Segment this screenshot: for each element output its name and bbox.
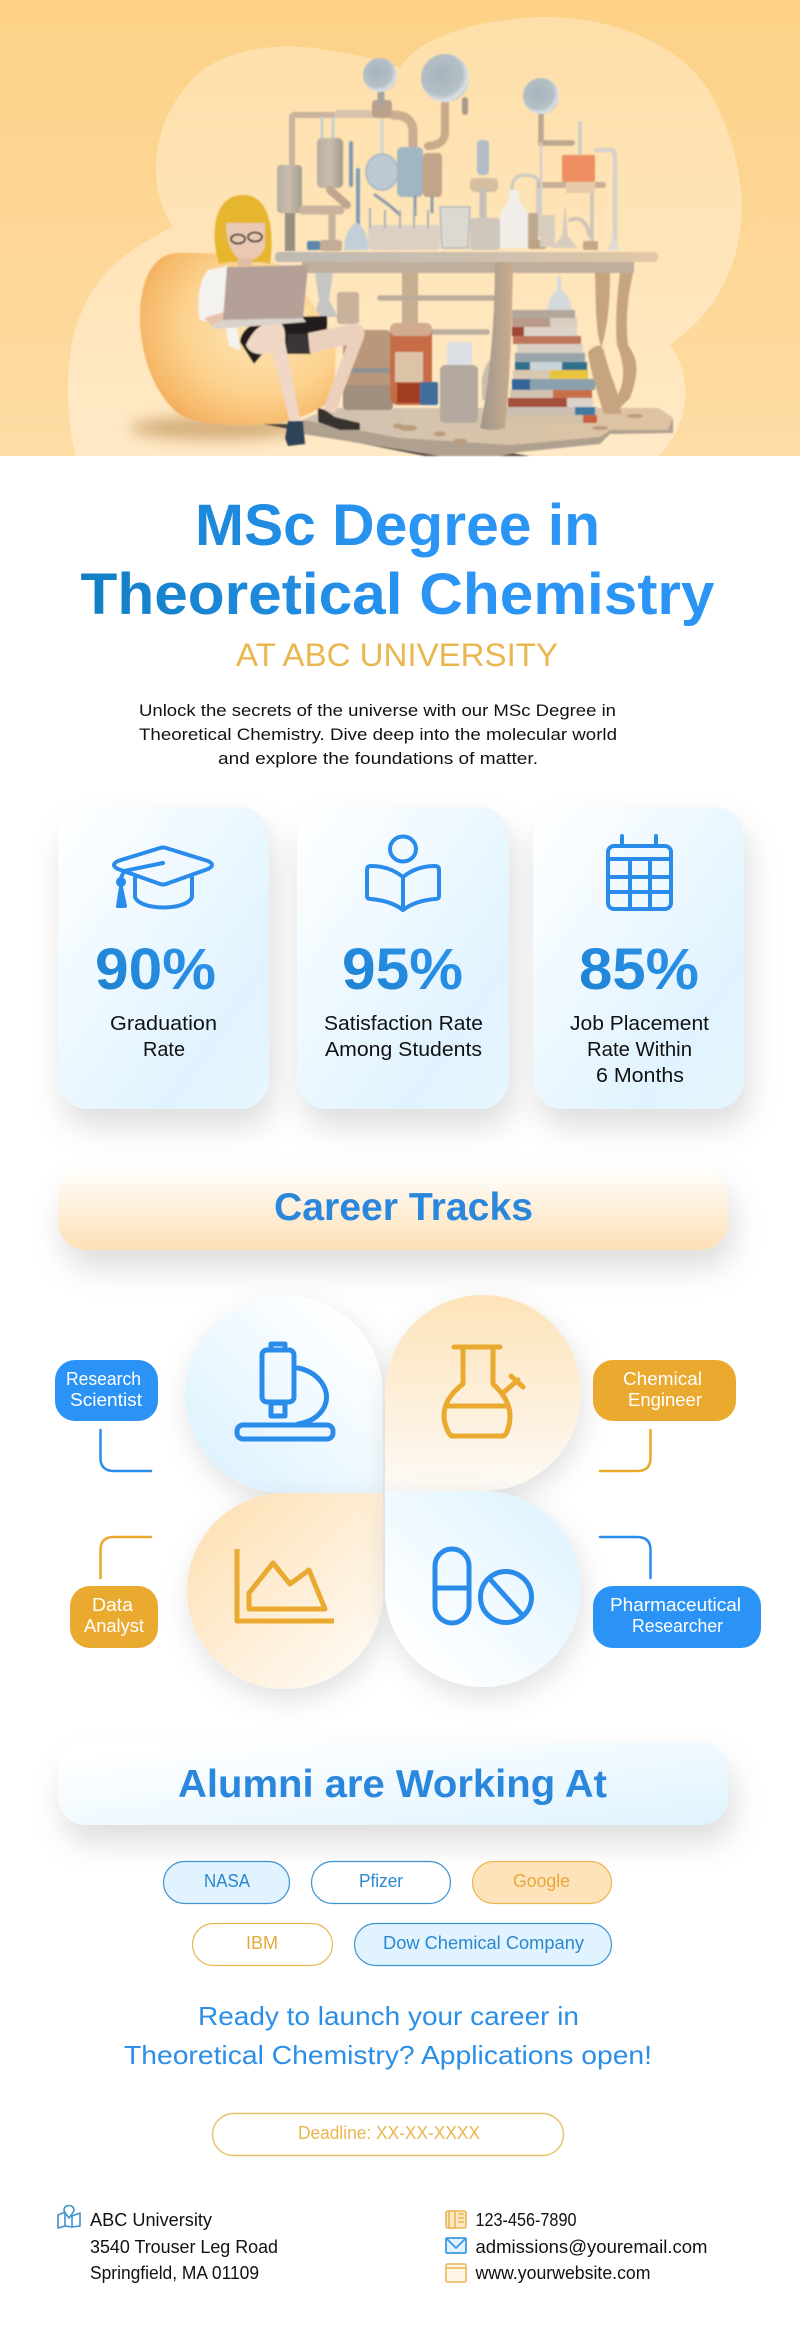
- stat label: Satisfaction Rate: [324, 1013, 483, 1035]
- under-table vessels: [314, 273, 572, 423]
- connector: chemical engineer: [600, 1430, 650, 1471]
- laptop: [223, 265, 308, 320]
- label: data analyst: [70, 1586, 158, 1648]
- upper pipework: [277, 92, 615, 251]
- icon: flask: [444, 1347, 523, 1436]
- bench base: [303, 408, 673, 456]
- pill: NASA: [164, 1862, 290, 1904]
- pill: Pfizer: Pfizer: [359, 1871, 403, 1891]
- stack of books: [507, 310, 597, 423]
- skirt: [240, 316, 327, 364]
- stat label: Rate Within: [587, 1039, 692, 1061]
- employer pills: [164, 1862, 612, 1966]
- shirt: [198, 266, 240, 350]
- subtitle: AT ABC UNIVERSITY: [236, 637, 558, 673]
- hair: [215, 195, 272, 264]
- pill: IBM: [192, 1924, 332, 1966]
- orange beaker: [562, 155, 595, 193]
- stat: 85%: 85%: [579, 937, 699, 1002]
- icon: mail: [446, 2238, 466, 2253]
- petal: research scientist: [185, 1295, 383, 1493]
- petal: data analyst: [187, 1493, 383, 1689]
- student: [198, 195, 365, 446]
- contact text: admissions@youremail.com: [476, 2237, 708, 2257]
- petal: pharmaceutical researcher: [385, 1491, 581, 1687]
- stat label: Job Placement: [570, 1013, 709, 1035]
- title: MSc Degree in: [195, 493, 600, 558]
- icon: browser window: [446, 2264, 466, 2282]
- connector: pharmaceutical researcher: [600, 1537, 650, 1578]
- forearm: [204, 312, 226, 326]
- 3D lab scene with student: [130, 54, 673, 456]
- intro paragraph: and explore the foundations of matter.: [218, 749, 538, 768]
- stat label: [570, 1013, 709, 1087]
- heading: alumni: [58, 1742, 728, 1825]
- face: [226, 223, 265, 261]
- pill: Google: [472, 1862, 612, 1904]
- call to action: [124, 2001, 652, 2070]
- glassware row: [307, 190, 620, 251]
- stat card: satisfaction rate: [297, 807, 509, 1109]
- label: data analyst: Data: [92, 1595, 134, 1615]
- floor shadows: [130, 416, 530, 456]
- petal: chemical engineer: [385, 1295, 581, 1491]
- pill: Dow Chemical Company: [354, 1924, 612, 1966]
- glass globes: [363, 54, 559, 114]
- contact text: [475, 2210, 708, 2283]
- footer contacts: [446, 2210, 708, 2283]
- address text: ABC University: [90, 2210, 212, 2230]
- icon: reader with book: [367, 836, 439, 910]
- label: chemical engineer: Engineer: [628, 1390, 702, 1410]
- stat label: Among Students: [325, 1039, 482, 1061]
- pill: Google: Google: [513, 1871, 570, 1891]
- label: research scientist: Scientist: [70, 1390, 142, 1410]
- label: pharmaceutical researcher: Pharmaceutical: [610, 1595, 741, 1615]
- heading: alumni: Alumni are Working At: [178, 1763, 607, 1806]
- stat card: graduation rate: [58, 807, 269, 1109]
- icon: graduation cap: [114, 848, 212, 908]
- heading: career tracks: [58, 1166, 728, 1250]
- connector: data analyst: [100, 1537, 151, 1578]
- address text: Springfield, MA 01109: [90, 2263, 259, 2283]
- hero illustration panel: [0, 0, 800, 456]
- table legs: [480, 262, 636, 430]
- icon: capsule and tablet: [435, 1549, 532, 1623]
- title: Theoretical Chemistry: [80, 562, 714, 627]
- pill: NASA: NASA: [204, 1871, 250, 1891]
- icon: calendar: [608, 836, 671, 909]
- title: [80, 493, 714, 627]
- deadline pill: [212, 2114, 564, 2156]
- stat label: 6 Months: [596, 1065, 684, 1087]
- label: research scientist: Research: [66, 1369, 141, 1389]
- contact text: www.yourwebsite.com: [475, 2263, 650, 2283]
- stat label: Graduation: [110, 1013, 217, 1035]
- label: chemical engineer: Chemical: [623, 1369, 702, 1389]
- icon: phone: [446, 2211, 466, 2228]
- label: pharmaceutical researcher: [593, 1586, 761, 1648]
- heading: career tracks: Career Tracks: [274, 1186, 533, 1229]
- intro paragraph: Unlock the secrets of the universe with our MSc Degree in: [139, 701, 616, 720]
- icon: map pin: [58, 2206, 80, 2228]
- pill: IBM: IBM: [246, 1933, 278, 1953]
- stat label: [110, 1013, 217, 1061]
- address text: [90, 2210, 278, 2283]
- stat label: [324, 1013, 483, 1061]
- call to action: Theoretical Chemistry? Applications open!: [124, 2040, 652, 2070]
- label: research scientist: [55, 1360, 158, 1421]
- address text: 3540 Trouser Leg Road: [90, 2237, 278, 2257]
- contact text: 123-456-7890: [476, 2210, 576, 2230]
- deadline pill: Deadline: XX-XX-XXXX: [298, 2123, 480, 2143]
- intro paragraph: [139, 701, 617, 768]
- label: data analyst: Analyst: [84, 1616, 144, 1636]
- label: chemical engineer: [593, 1360, 736, 1421]
- stat: 90%: 90%: [95, 937, 216, 1002]
- stat label: Rate: [143, 1039, 185, 1061]
- bean bag: [140, 253, 336, 425]
- intro paragraph: Theoretical Chemistry. Dive deep into the molecular world: [139, 725, 617, 744]
- left leg: [246, 322, 300, 422]
- table top: [275, 252, 658, 273]
- career tracks diagram: [55, 1295, 761, 1689]
- background blob: [68, 17, 742, 456]
- right leg: [308, 323, 365, 413]
- call to action: Ready to launch your career in: [198, 2001, 579, 2031]
- pill: Dow Chemical Company: Dow Chemical Company: [383, 1933, 584, 1953]
- stat: 95%: 95%: [342, 937, 463, 1002]
- shoes: [318, 408, 360, 430]
- stat card: job placement: [533, 807, 744, 1109]
- footer address: [58, 2206, 278, 2283]
- icon: microscope: [237, 1344, 333, 1439]
- glasses: [231, 232, 262, 244]
- label: pharmaceutical researcher: Researcher: [632, 1616, 723, 1636]
- connector: research scientist: [100, 1430, 151, 1471]
- pill: Pfizer: [312, 1862, 450, 1904]
- icon: area chart: [237, 1549, 334, 1621]
